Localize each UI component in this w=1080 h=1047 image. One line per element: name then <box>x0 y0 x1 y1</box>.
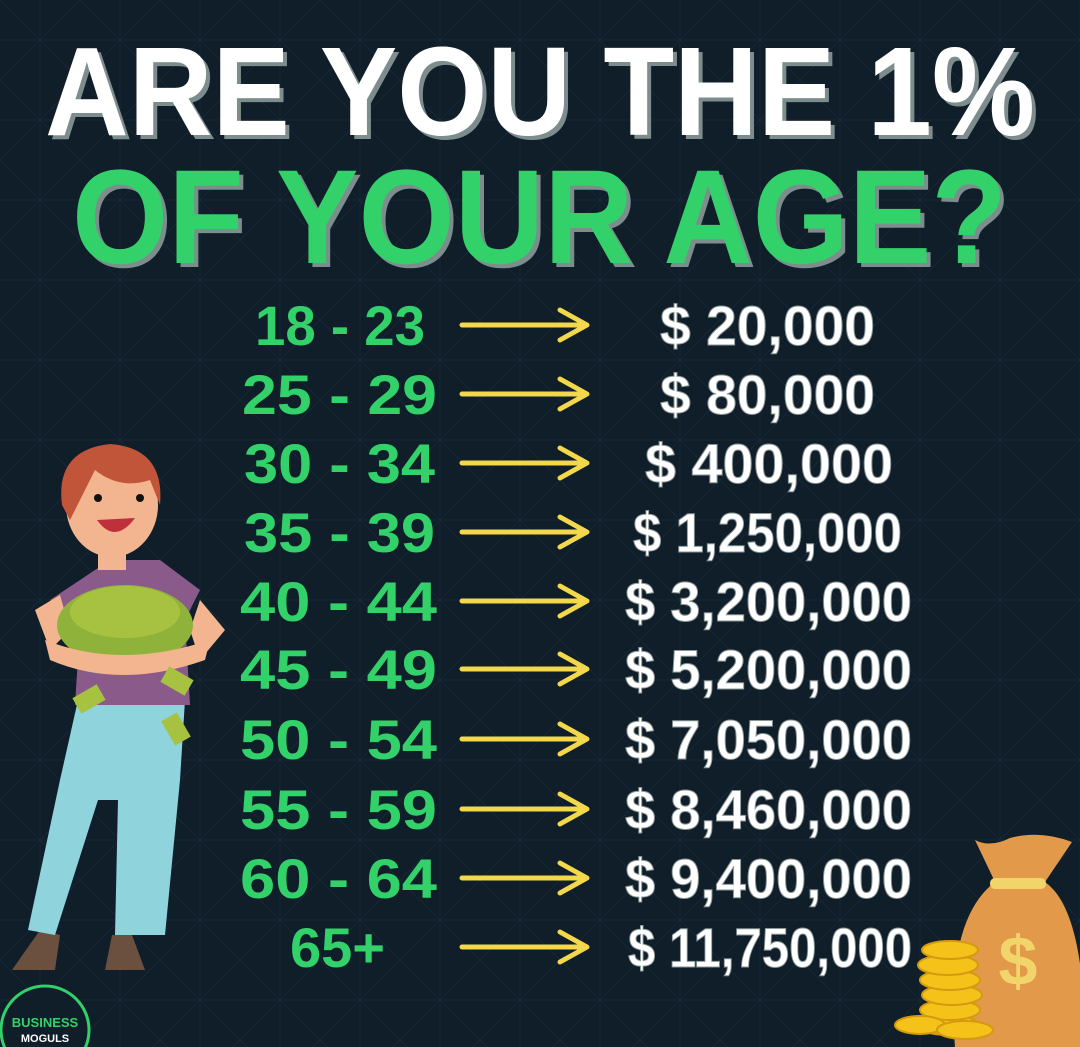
age and amount table: $ 7,050,000 <box>625 708 912 771</box>
age and amount table: 18 - 23 <box>255 294 425 357</box>
age and amount table: $ 11,750,000 <box>628 916 912 979</box>
arrows <box>462 310 587 962</box>
age and amount table: $ 20,000 <box>660 294 875 357</box>
age and amount table: 50 - 54 <box>240 708 437 771</box>
age and amount table: $ 80,000 <box>660 363 875 426</box>
age and amount table: $ 400,000 <box>645 432 893 495</box>
age and amount table: $ 3,200,000 <box>625 570 912 633</box>
logo: business moguls: BUSINESS <box>12 1015 79 1030</box>
money bag with coins: $ <box>999 922 1037 1000</box>
title <box>45 21 1039 296</box>
money bag with coins <box>895 835 1080 1047</box>
age and amount table: $ 5,200,000 <box>625 638 912 701</box>
age and amount table: 60 - 64 <box>240 847 437 910</box>
logo: business moguls: MOGULS <box>21 1033 69 1045</box>
age and amount table: 35 - 39 <box>244 501 435 564</box>
age and amount table <box>240 294 912 979</box>
character holding money <box>12 444 225 970</box>
age and amount table: $ 8,460,000 <box>625 778 912 841</box>
age and amount table: 30 - 34 <box>244 432 435 495</box>
age and amount table: $ 1,250,000 <box>633 501 902 564</box>
age and amount table: $ 9,400,000 <box>625 847 912 910</box>
age and amount table: 45 - 49 <box>240 638 437 701</box>
age and amount table: 65+ <box>290 916 385 979</box>
age and amount table: 55 - 59 <box>240 778 437 841</box>
title: OF YOUR AGE? <box>72 143 1007 292</box>
logo: business moguls <box>1 986 89 1047</box>
age and amount table: 40 - 44 <box>240 570 437 633</box>
age and amount table: 25 - 29 <box>242 363 437 426</box>
title: OF YOUR AGE? <box>76 147 1011 296</box>
